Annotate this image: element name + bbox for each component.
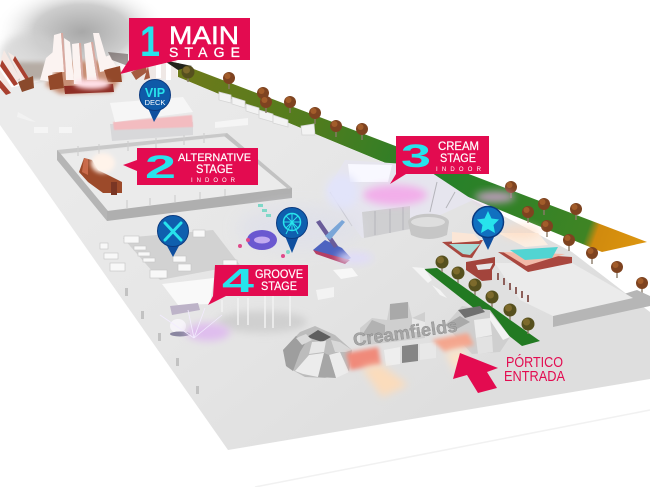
VIP deck building	[110, 97, 193, 141]
grey food court floor	[123, 230, 240, 280]
main stage smoke	[0, 0, 170, 82]
left pyramid	[283, 326, 352, 378]
label: portico entrada: PÓRTICO	[506, 354, 563, 371]
label 1: main stage	[120, 18, 250, 74]
fairground rides	[238, 204, 373, 300]
label 3: cream stage: STAGE	[440, 153, 476, 165]
cream stage building	[326, 160, 473, 238]
centre tower and blocks	[360, 302, 436, 366]
label 2: alternative stage: STAGE	[196, 164, 233, 176]
pin: food	[158, 216, 188, 257]
ground plane	[0, 68, 650, 450]
label 3: cream stage: INDOOR	[436, 167, 482, 173]
sign: Creamfields	[352, 316, 459, 350]
grass strip	[178, 63, 647, 252]
label 4: groove stage: 4	[222, 262, 255, 299]
white pavement edge line	[255, 410, 650, 487]
tables near VIP	[17, 112, 248, 133]
garden	[412, 256, 540, 346]
label 4: groove stage: STAGE	[261, 279, 297, 293]
groove stage	[160, 278, 307, 341]
entrance portico	[283, 302, 510, 378]
label 3: cream stage	[390, 136, 489, 184]
label 4: groove stage: GROOVE	[255, 267, 303, 281]
right pyramid	[445, 306, 510, 354]
label: portico entrada	[504, 354, 565, 385]
food tables	[100, 230, 237, 278]
label 3: cream stage: CREAM	[438, 141, 479, 153]
pin: ferris wheel	[276, 208, 308, 253]
label 2: alternative stage	[123, 148, 258, 185]
arrow: entrance	[453, 353, 498, 393]
pin: star	[472, 206, 504, 250]
label 2: alternative stage: ALTERNATIVE	[178, 152, 251, 164]
round arena	[408, 214, 449, 239]
label 1: main stage: 1	[140, 18, 160, 66]
label 2: alternative stage: INDOOR	[191, 178, 236, 184]
label 3: cream stage: 3	[401, 138, 431, 174]
pin: VIP deck: DECK	[145, 98, 165, 107]
pools and courtyard	[442, 225, 650, 327]
trees on strip	[182, 66, 648, 294]
label 1: main stage: MAIN	[169, 22, 239, 50]
label 4: groove stage	[208, 262, 308, 305]
light beams at strip	[475, 191, 515, 203]
service cabins along strip	[219, 92, 315, 135]
perimeter markers	[125, 288, 199, 394]
main stage	[0, 33, 192, 95]
alternative stage hall	[57, 133, 292, 221]
pin: VIP deck: VIP	[145, 86, 165, 100]
label: portico entrada: ENTRADA	[504, 369, 565, 385]
label 2: alternative stage: 2	[145, 149, 176, 185]
pin: VIP deck	[140, 80, 170, 122]
gate lights	[346, 333, 474, 397]
label 1: main stage: STAGE	[169, 44, 240, 60]
